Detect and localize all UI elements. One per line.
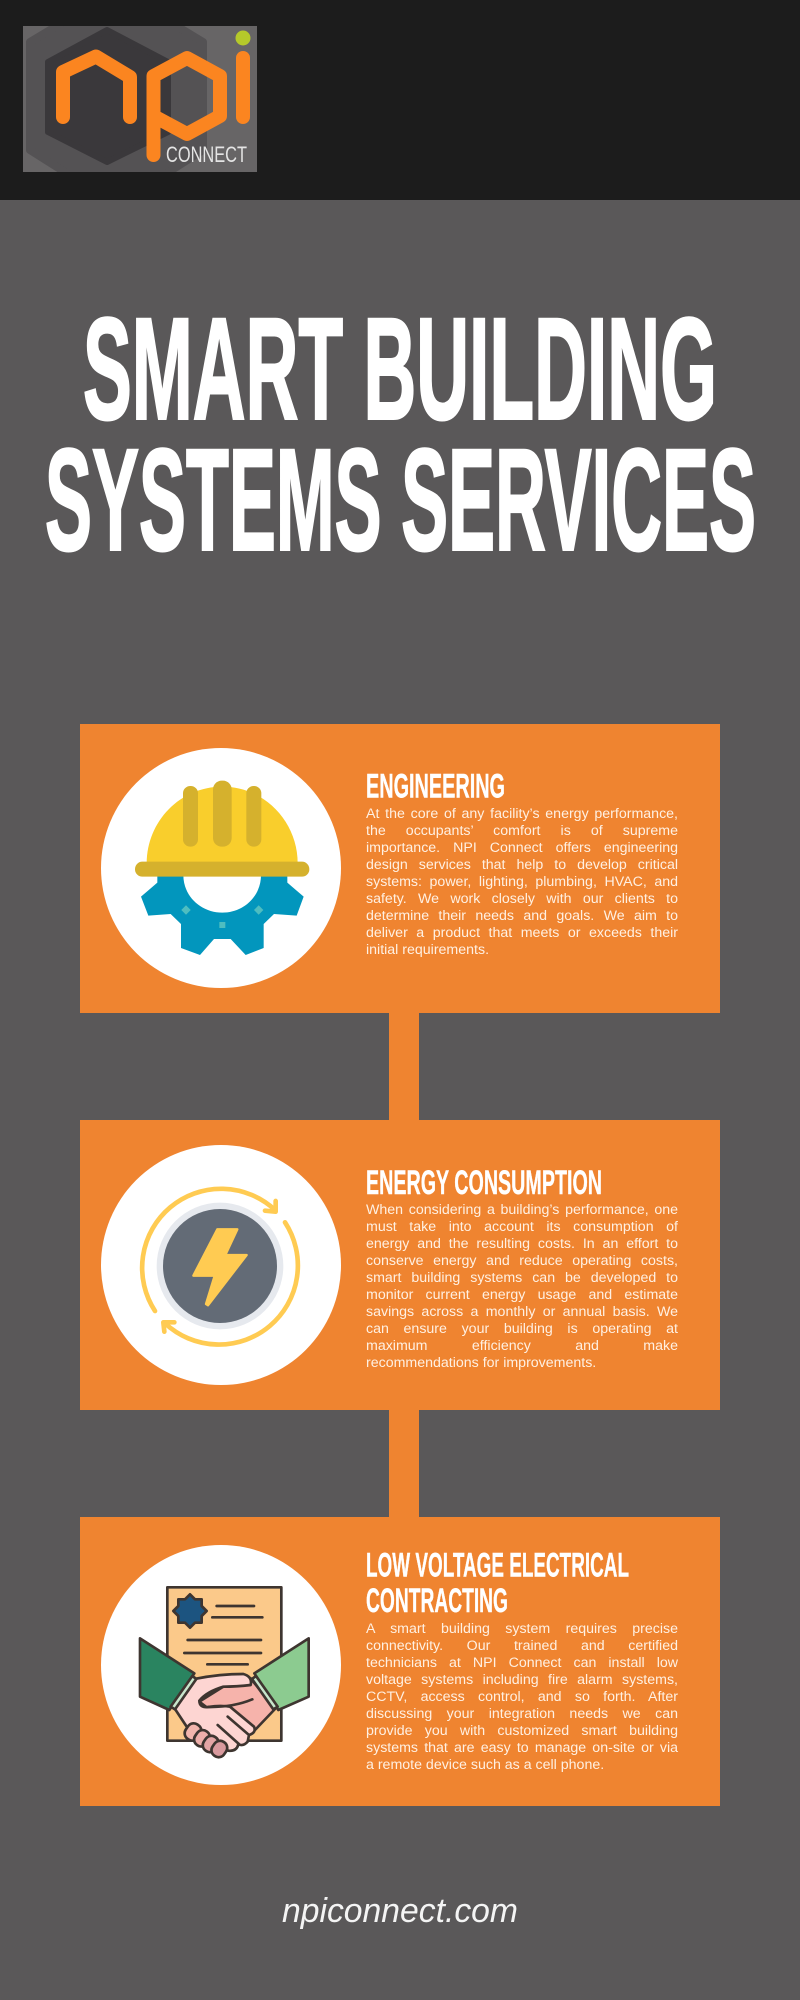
panel: low voltage electrical contracting (80, 1517, 720, 1806)
connector: engineering to energy (389, 1012, 419, 1122)
text: energy consumption: maximum efficiency and make (366, 1338, 678, 1354)
text: energy consumption: recommendations for improvements. (366, 1355, 596, 1371)
text: low voltage electrical contracting: a remote device such as a cell phone. (366, 1757, 604, 1773)
text: low voltage electrical contracting: CCTV, access control, and so forth. After (366, 1689, 678, 1705)
text: low voltage electrical contracting: technicians at NPI Connect can install low (366, 1655, 678, 1671)
text: low voltage electrical contracting (366, 1621, 678, 1773)
text: low voltage electrical contracting: A smart building system requires precise (366, 1621, 678, 1637)
logo: NPI Connect (23, 26, 257, 172)
website URL: npiconnect.com (282, 1892, 518, 1930)
connector: energy to low voltage (389, 1408, 419, 1519)
text: engineering: At the core of any facility’s energy performance, (366, 806, 678, 822)
text: energy consumption (366, 1202, 678, 1371)
panel: energy consumption (80, 1120, 720, 1410)
icon: hard hat and gear (101, 748, 341, 988)
text: low voltage electrical contracting: systems that are easy to manage on-site or via (366, 1740, 678, 1756)
heading: engineering: ENGINEERING (366, 768, 505, 806)
text: engineering: systems: power, lighting, plumbing, HVAC, and (366, 874, 678, 890)
icon: handshake over contract (101, 1545, 341, 1785)
text: energy consumption: smart building systems can be developed to (366, 1270, 678, 1286)
panel: engineering (80, 724, 720, 1013)
text: low voltage electrical contracting: voltage systems including fire alarm systems, (366, 1672, 678, 1688)
text: engineering: initial requirements. (366, 942, 489, 958)
text: energy consumption: must take into account its consumption of (366, 1219, 678, 1235)
text: energy consumption: conserve energy and reduce operating costs, (366, 1253, 678, 1269)
text: energy consumption: savings across a monthly or annual basis. We (366, 1304, 678, 1320)
text: engineering (366, 806, 678, 958)
text: engineering: safety. We work closely with our clients to (366, 891, 678, 907)
icon: energy lightning bolt (101, 1145, 341, 1385)
text: low voltage electrical contracting: provide you with customized smart building (366, 1723, 678, 1739)
text: energy consumption: can ensure your building is operating at (366, 1321, 678, 1337)
heading: low voltage electrical contracting: CONTRACTING (366, 1582, 508, 1620)
heading: low voltage electrical contracting (366, 1547, 629, 1620)
text: low voltage electrical contracting: discussing your integration needs we can (366, 1706, 678, 1722)
text: engineering: determine their needs and goals. We aim to (366, 908, 678, 924)
title (45, 288, 756, 581)
text: low voltage electrical contracting: connectivity. Our trained and certified (366, 1638, 678, 1654)
header band (0, 0, 800, 200)
text: energy consumption: When considering a building’s performance, one (366, 1202, 678, 1218)
text: energy consumption: monitor current energy usage and estimate (366, 1287, 678, 1303)
heading: energy consumption: ENERGY CONSUMPTION (366, 1164, 602, 1202)
text: engineering: deliver a product that meets or exceeds their (366, 925, 678, 941)
text: engineering: the occupants’ comfort is of supreme (366, 823, 678, 839)
text: energy consumption: energy and the resulting costs. In an effort to (366, 1236, 678, 1252)
text: engineering: design services that help to develop critical (366, 857, 678, 873)
text: engineering: importance. NPI Connect offers engineering (366, 840, 678, 856)
